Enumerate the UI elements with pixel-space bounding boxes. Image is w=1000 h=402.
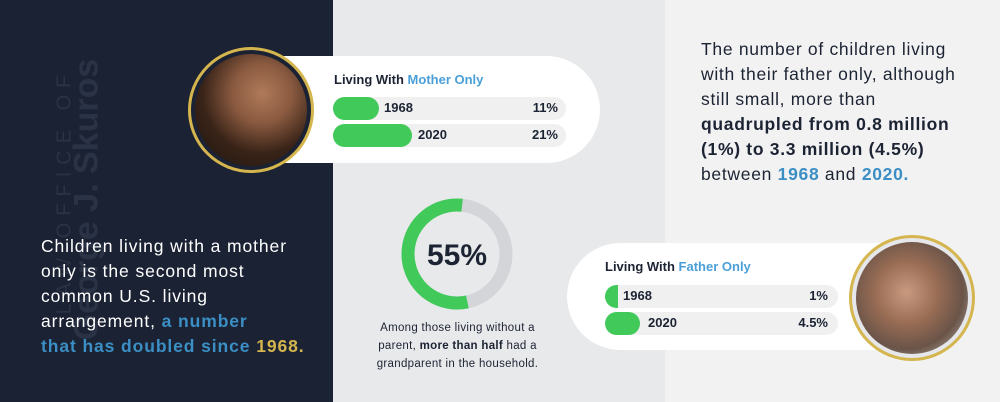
bar 2020: 2020 [648,315,677,330]
text: donut caption: Among those living without a [380,322,535,334]
panel: middle gray [333,0,665,402]
text block: mother stat: that has doubled since 1968. [41,336,304,356]
panel: father only card [567,243,900,350]
text block: father stat: The number of children living [701,39,946,59]
bar 2020 [605,312,838,335]
bar 2020: 21% [532,127,558,142]
text block: father stat: still small, more than [701,89,876,109]
bar 1968: 1968 [384,100,413,115]
text block: father stat: between 1968 and 2020. [701,164,909,184]
icon: father photo [849,235,975,361]
text: donut caption: grandparent in the household. [377,358,538,370]
bar 1968 [333,97,566,120]
text block: mother stat: Children living with a mother [41,236,287,256]
panel: dark left [0,0,333,402]
donut chart [402,198,512,310]
icon: mother photo [188,47,314,173]
text block: mother stat: common U.S. living [41,286,208,306]
bar 2020: 4.5% [798,315,828,330]
text block: father stat: with their father only, although [701,64,956,84]
text block: mother stat: arrangement, a number [41,311,248,331]
text block: father stat: quadrupled from 0.8 million [701,114,949,134]
text block: mother stat: only is the second most [41,261,245,281]
watermark: George J. Skuros [68,59,106,340]
text block: father stat: (1%) to 3.3 million (4.5%) [701,139,924,159]
watermark: LAW OFFICE OF [54,69,76,314]
heading: Living With Father Only [605,259,751,274]
bar 1968 [605,285,838,308]
donut chart: 55% [427,239,487,272]
bar 1968: 1968 [623,288,652,303]
bar 2020 [333,124,566,147]
bar 2020: 2020 [418,127,447,142]
bar 1968: 1% [809,288,828,303]
heading: Living With Mother Only [334,72,483,87]
bar 1968: 11% [533,100,558,115]
text: donut caption [377,322,538,370]
text block: father stat [701,39,956,184]
text block: mother stat [41,236,304,356]
panel: mother only card [280,56,600,163]
text: donut caption: parent, more than half had a [378,340,537,352]
